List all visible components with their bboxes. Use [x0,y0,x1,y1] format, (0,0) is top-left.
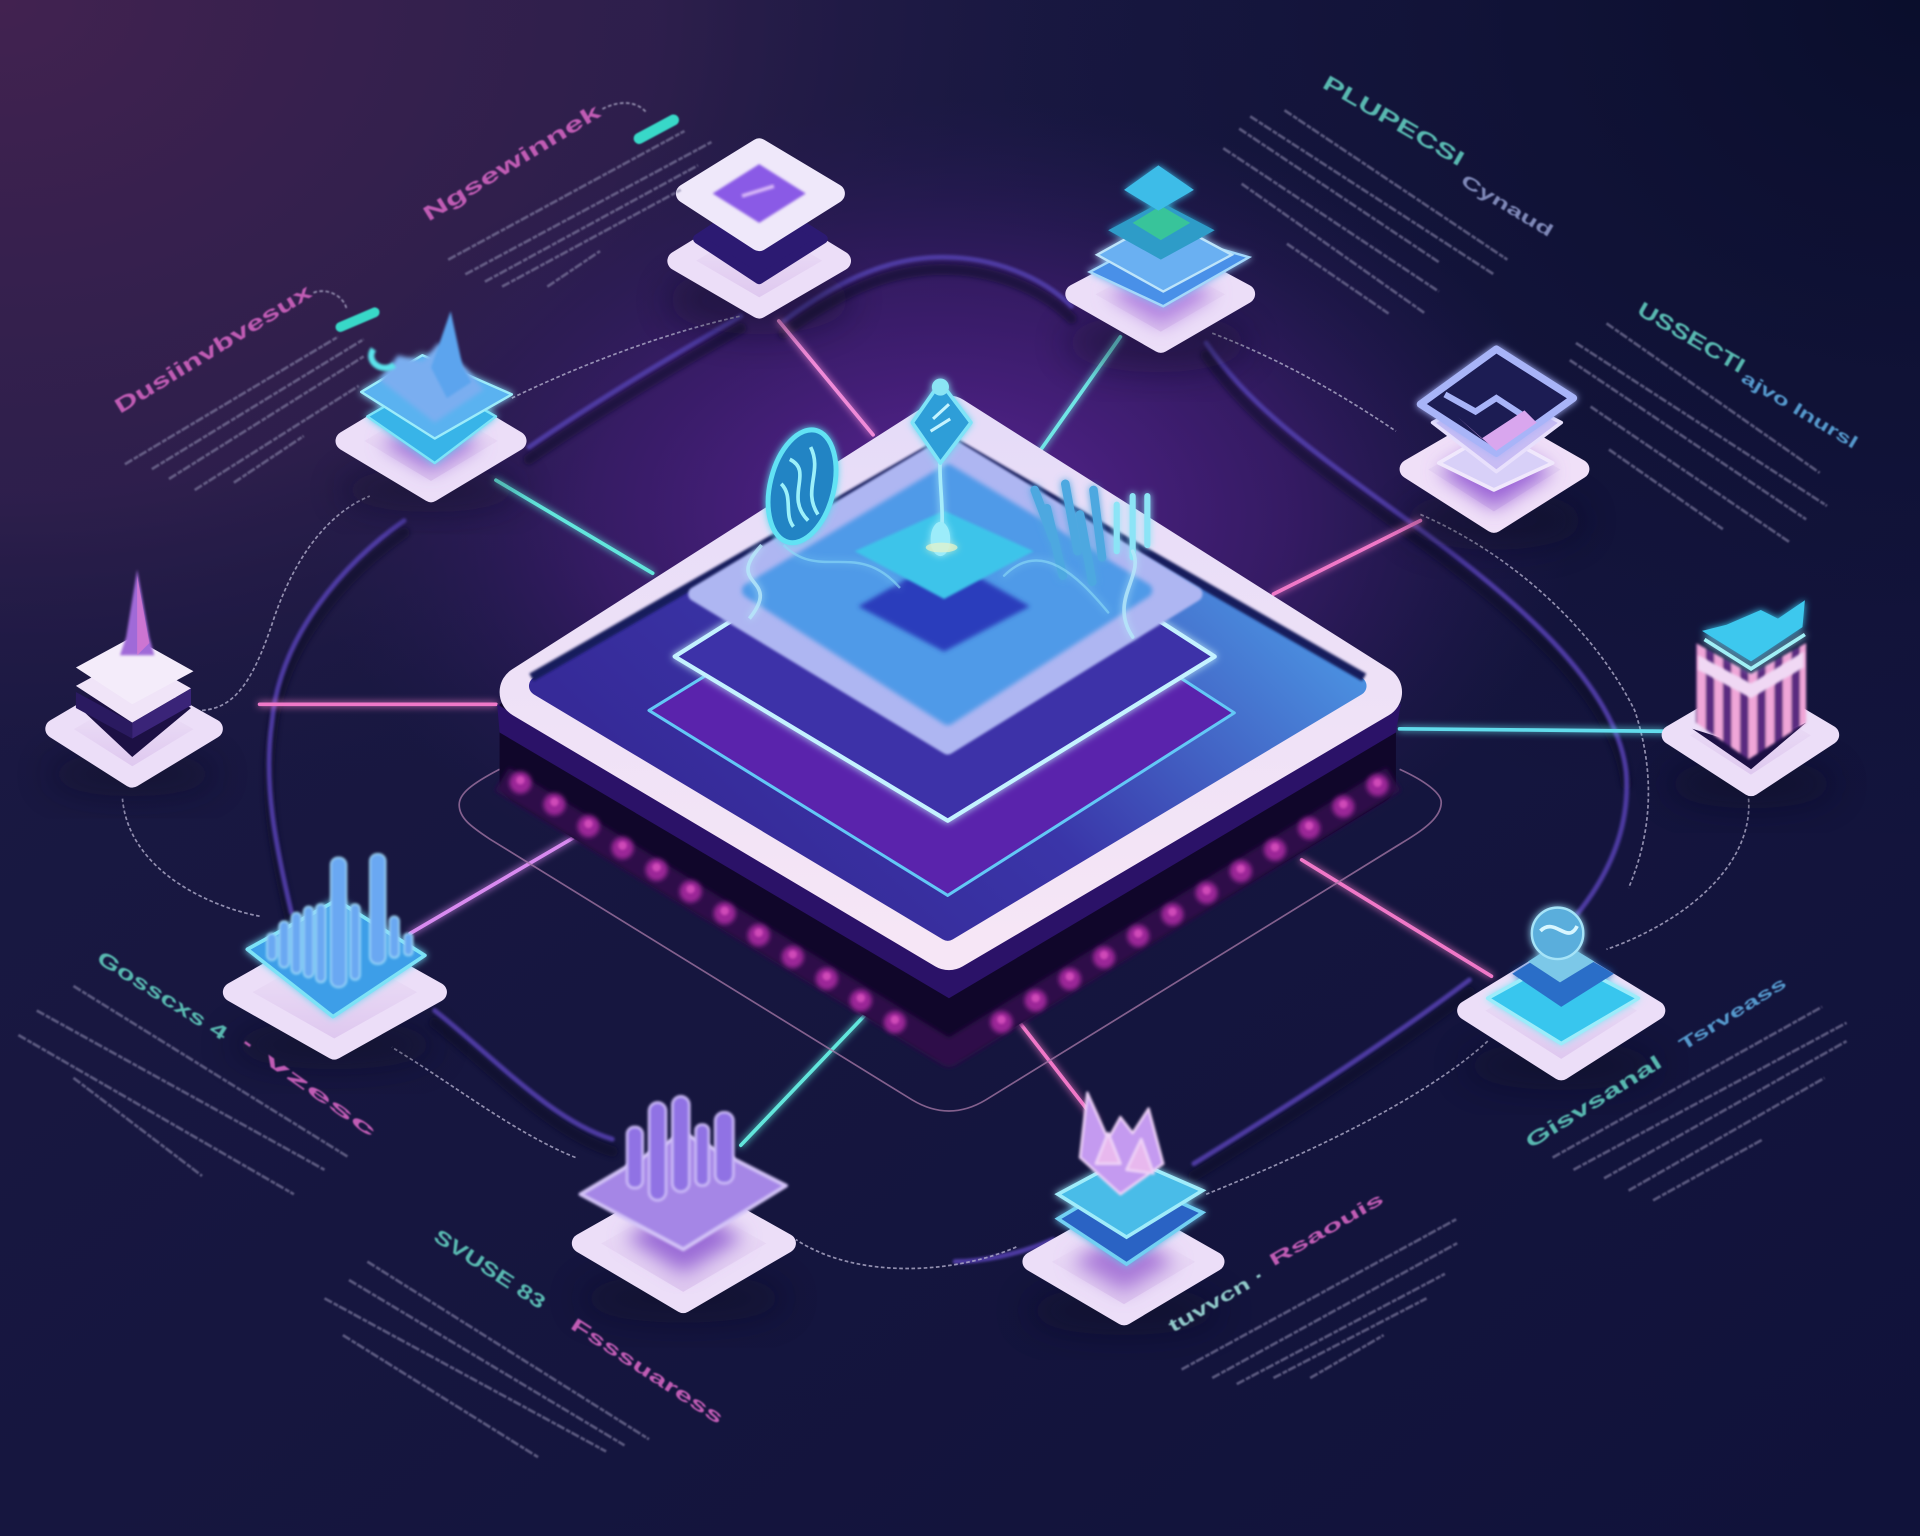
plate [1671,688,1829,786]
blue stack icon [1090,165,1249,306]
body lines [1570,323,1827,543]
plate [345,390,517,492]
lower plate [677,211,841,309]
node: bottom purple city [579,1096,787,1323]
node: top flat card [667,148,851,334]
heading: Gisvsanal [1522,1051,1666,1153]
heading: Dusiinvbvesux [111,280,316,418]
stacked sheets [1439,431,1553,490]
purple square [713,164,806,223]
node: left blue spire [339,311,523,512]
blue layers [361,355,512,463]
platform upper side [497,704,1401,998]
plate [1032,1210,1215,1316]
text block: lower right card [1522,972,1847,1200]
purple upper plate [580,1133,786,1249]
node: far left obelisk [47,570,218,796]
blue layers [1058,1158,1202,1264]
node: lower right sphere [1463,908,1659,1090]
body lines [1182,1219,1457,1384]
text block: top right card [1223,71,1557,314]
plate [55,683,213,778]
dark pedestal shadow [858,557,1030,652]
purple towers [627,1096,733,1200]
text block: right card [1570,298,1862,543]
sub heading: ajvo Inursl [1738,367,1862,452]
hologram: central fountain [912,378,971,556]
heading: Gosscxs 4 [93,947,231,1045]
text block: lower left card [18,947,381,1194]
tower white band [1698,652,1804,698]
ring of dark connector curves [269,257,1627,1262]
dashed thin connector curves [122,316,1749,1269]
platform inner face [539,451,1357,931]
inner top edge shadow [531,439,1364,677]
sub heading: · vzesc [236,1032,381,1142]
plate [233,935,437,1050]
accent pill [340,312,375,327]
central platform [459,378,1441,1111]
dark middle layer [698,198,823,279]
cyan pedestal [855,511,1033,599]
text block: top left card [419,100,711,287]
top translucent layer [696,443,1195,747]
body lines [324,1262,649,1458]
platform footprint outline [459,769,1441,1111]
node: lower left blue city [230,854,438,1069]
text block: upper left card [111,280,375,490]
hologram: left coil [748,423,900,619]
cyan layers [1488,908,1638,1044]
striped tower [1696,643,1806,759]
blue city towers [267,854,413,987]
lower outlined layer [649,527,1234,895]
text block: bottom right card [1165,1188,1457,1384]
heading: SVUSE 83 [430,1225,549,1314]
obelisk [120,570,154,655]
accent pill [639,120,673,138]
middle outlined layer [675,485,1215,821]
text block: bottom left card [324,1225,728,1458]
body lines [125,337,364,490]
upper plate [686,148,835,241]
body lines [18,986,349,1194]
stack [76,674,191,757]
lower magenta light band [502,779,1393,1053]
body lines [448,131,711,287]
sub heading: Fsssuaress [567,1314,728,1428]
node: far right striped tower [1665,600,1837,808]
plate [582,1186,786,1303]
sub heading: Tsrveass [1675,972,1790,1054]
plate [1467,953,1656,1071]
spire [431,311,471,398]
top layer blue face [749,472,1145,718]
heading: tuvvcn · [1165,1264,1268,1336]
purple crystals [1080,1093,1163,1194]
sub heading: Cynaud [1458,170,1557,241]
plate [1409,420,1580,523]
platform white rim [527,423,1375,943]
plate [1075,249,1245,343]
heading: PLUPECSI [1319,71,1468,171]
node: bottom right stack [1026,1093,1222,1335]
heading: USSECTI [1633,298,1749,378]
platform base and side wall [500,441,1396,1061]
body lines [1223,110,1507,314]
node: right outline chart stack [1402,349,1586,550]
body lines [1553,1007,1847,1200]
blue city base [247,900,425,1017]
sub heading: Rsaouis [1265,1188,1387,1270]
heading: Ngsewinnek [419,100,605,226]
neon spoke connectors [260,321,1665,1145]
node: top right stack [1065,165,1249,372]
tower top [1702,600,1805,669]
outline chart icon [1420,349,1573,453]
hologram: right bars [1004,484,1147,637]
blue crystal cloud [380,343,484,423]
